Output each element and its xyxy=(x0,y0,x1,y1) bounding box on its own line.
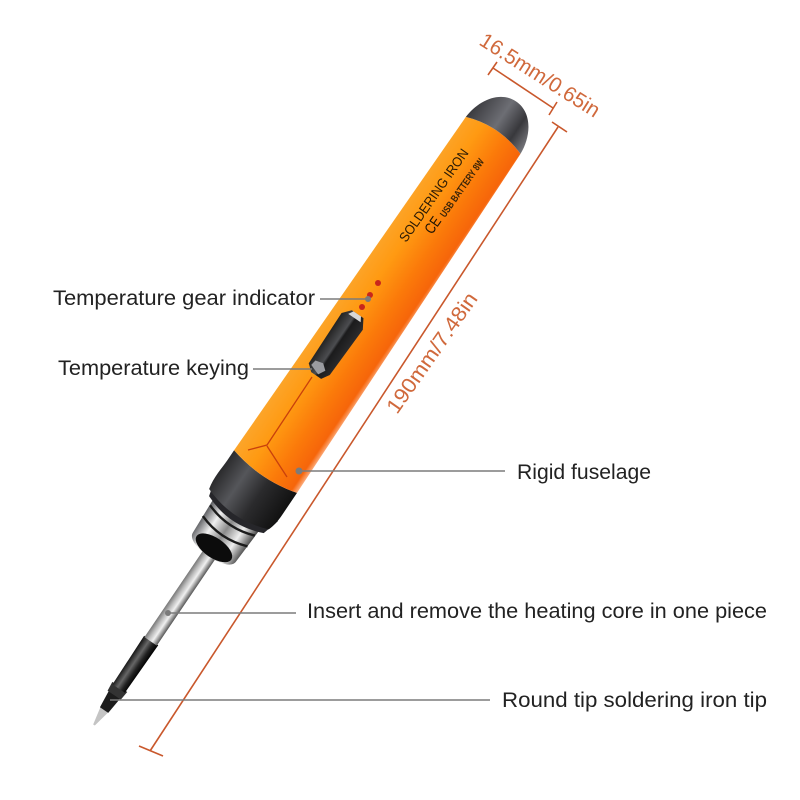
metal tip point xyxy=(90,706,109,728)
rear cap xyxy=(466,83,543,154)
temperature button xyxy=(305,306,368,383)
collar grooves xyxy=(200,505,255,551)
dimension: length xyxy=(139,122,567,756)
orange body xyxy=(231,109,528,497)
callout: heating core: Insert and remove the heating core in one piece xyxy=(307,600,767,623)
callout: temperature gear indicator: Temperature gear indicator xyxy=(53,287,315,310)
callout: temperature keying: Temperature keying xyxy=(58,357,249,380)
body text: CE mark: CE xyxy=(421,214,445,237)
body text: USB battery: USB BATTERY 8W xyxy=(438,157,487,220)
body text: product name: SOLDERING IRON xyxy=(396,146,472,245)
dimension: diameter: 16.5mm/0.65in xyxy=(475,29,604,122)
metal shaft xyxy=(144,543,221,646)
seam lines xyxy=(248,377,312,477)
indicator lights xyxy=(359,280,381,310)
callout: rigid fuselage xyxy=(296,461,651,484)
callout: rigid fuselage: Rigid fuselage xyxy=(517,461,651,484)
soldering iron xyxy=(62,80,548,746)
tip flange xyxy=(107,682,127,700)
dimension: length: 190mm/7.48in xyxy=(382,288,483,418)
neck ring xyxy=(201,478,278,542)
black front cap xyxy=(204,450,297,537)
collar opening xyxy=(191,528,237,568)
black tip cone xyxy=(98,690,121,714)
chrome collar xyxy=(185,496,262,572)
black tip sleeve xyxy=(112,636,158,693)
callout: iron tip: Round tip soldering iron tip xyxy=(502,689,767,712)
